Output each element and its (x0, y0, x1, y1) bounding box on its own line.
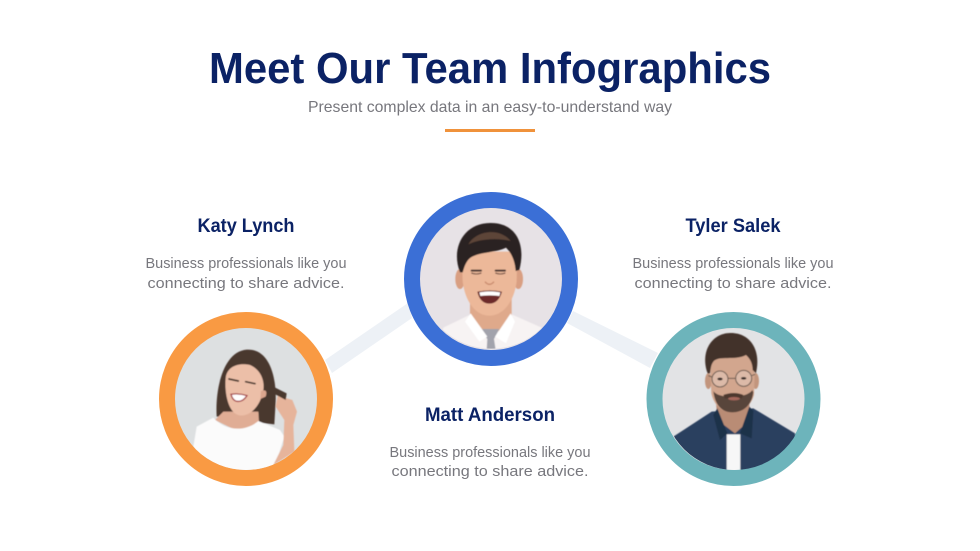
profile heading: Katy Lynch: Katy Lynch (198, 216, 294, 237)
profile heading: Matt Anderson: Matt Anderson (425, 405, 555, 426)
portrait: Katy Lynch, orange ring (167, 320, 325, 478)
connector: left to center (325, 303, 412, 373)
profile text: Katy Lynch: connecting to share advice. (148, 275, 344, 292)
subtitle: Present complex data in an easy-to-understand way (308, 99, 672, 116)
profile text: Katy Lynch (146, 255, 346, 292)
title: Meet Our Team Infographics (209, 44, 771, 93)
profile text: Matt Anderson: connecting to share advice. (392, 463, 588, 480)
profile text: Tyler Salek: Business professionals like you (632, 255, 834, 272)
connector: center to right (567, 311, 658, 368)
profile text: Matt Anderson (390, 444, 590, 480)
profile heading: Tyler Salek: Tyler Salek (686, 216, 781, 237)
profile text: Matt Anderson: Business professionals like you (390, 444, 590, 461)
portrait: Matt Anderson, blue ring (412, 200, 570, 358)
portrait: Tyler Salek, teal ring (654, 320, 812, 478)
profile text: Tyler Salek (632, 255, 834, 292)
profile text: Tyler Salek: connecting to share advice. (634, 275, 832, 292)
profile text: Katy Lynch: Business professionals like you (146, 255, 346, 272)
title underline (445, 129, 535, 132)
